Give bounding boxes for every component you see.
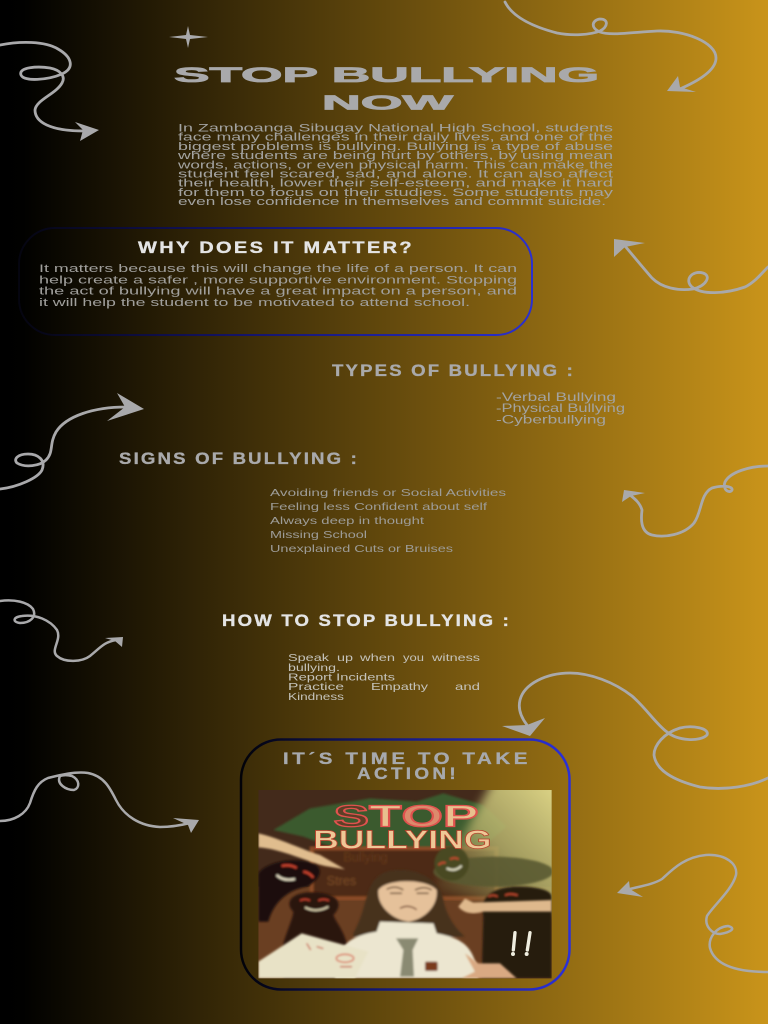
list: types of bullying <box>496 390 625 426</box>
list: signs of bullying: Always deep in thought <box>270 515 424 527</box>
list: signs of bullying <box>270 487 506 555</box>
heading: why does it matter: WHY DOES IT MATTER? <box>138 238 414 257</box>
list: how to stop bullying: you <box>403 652 424 664</box>
intro paragraph: face many challenges in their daily lives, and one of the <box>178 132 613 144</box>
intro paragraph: their health, lower their self-esteem, and make it hard <box>178 178 613 190</box>
list: how to stop bullying: witness <box>431 652 480 664</box>
text: why it matters: it will help the student to be motivated to attend school. <box>39 297 470 309</box>
heading: types of bullying: TYPES OF BULLYING : <box>332 361 575 380</box>
chalkboard: Bullying <box>343 851 388 865</box>
list: how to stop bullying: Speak <box>288 652 330 664</box>
title <box>174 64 599 114</box>
girl <box>335 870 478 978</box>
list: types of bullying: -Physical Bullying <box>496 401 625 415</box>
intro paragraph: biggest problems is bullying. Bullying is a type of abuse <box>178 141 613 153</box>
arrow: top-right curl <box>505 2 716 92</box>
list: how to stop bullying: bullying. <box>288 662 340 674</box>
list: signs of bullying: Missing School <box>270 529 367 541</box>
title: NOW <box>322 92 453 114</box>
arrow: large right curl pointing down-left <box>502 673 768 788</box>
list: how to stop bullying: and <box>455 681 480 693</box>
shadow figure left bottom <box>283 892 347 978</box>
list: how to stop bullying: up <box>337 652 353 664</box>
list: how to stop bullying: Empathy <box>371 681 429 693</box>
spotlight <box>436 790 552 917</box>
heading: it's time to take action: IT´S TIME TO TAKE <box>283 749 531 768</box>
illustration: stop bullying poster <box>258 780 563 978</box>
heading: how to stop bullying: HOW TO STOP BULLYING : <box>222 611 511 630</box>
hand pointing right <box>458 898 552 913</box>
arrow: right curl pointing up-left <box>614 239 768 293</box>
arrow: left curl pointing right <box>0 393 144 489</box>
list: how to stop bullying: Practice <box>288 681 344 693</box>
shadow figure right top <box>433 846 553 887</box>
icon: sparkle star <box>169 26 208 48</box>
chalkboard <box>312 848 497 898</box>
intro paragraph: even lose confidence in themselves and commit suicide. <box>178 196 606 208</box>
small loop <box>59 775 78 790</box>
list: types of bullying: -Cyberbullying <box>496 412 606 426</box>
exam paper <box>258 933 368 978</box>
panel: why does it matter <box>19 228 532 335</box>
arrow: top-left curl <box>0 42 99 141</box>
tree foliage <box>274 792 486 848</box>
list: types of bullying: -Verbal Bullying <box>496 390 616 404</box>
poster text: BULLYING <box>313 825 491 855</box>
hand pointing left <box>258 833 345 869</box>
heading: it's time to take action: ACTION! <box>357 764 459 783</box>
panel: take action <box>241 740 570 990</box>
arrow: right squiggle pointing left <box>622 466 768 536</box>
list: how to stop bullying: Report Incidents <box>288 672 395 684</box>
hand bottom <box>462 953 517 978</box>
intro paragraph: student feel scared, sad, and alone. It can also affect <box>178 168 613 180</box>
arrow: left squiggle pointing right <box>0 600 123 661</box>
intro paragraph: words, actions, or even physical harm. This can make the <box>176 159 613 171</box>
list: signs of bullying: Unexplained Cuts or Bruises <box>270 543 453 555</box>
poster text: STOP <box>333 800 478 834</box>
intro paragraph <box>176 122 614 208</box>
heading: it's time to take action <box>283 749 531 783</box>
shadow figure right bottom <box>482 887 552 978</box>
arrow: bottom-right curl <box>617 855 768 972</box>
chalkboard: Stres <box>327 874 356 888</box>
text: why it matters: It matters because this will change the life of a person. It can <box>39 263 517 275</box>
list: how to stop bullying: Kindness <box>288 691 344 703</box>
exclamation marks <box>511 933 530 956</box>
list: how to stop bullying: when <box>359 652 395 664</box>
arrow: bottom-left curl <box>0 772 199 833</box>
list: signs of bullying: Avoiding friends or Social Activities <box>270 487 506 499</box>
intro paragraph: where students are being hurt by others, by using mean <box>176 150 613 162</box>
heading: signs of bullying: SIGNS OF BULLYING : <box>119 449 359 468</box>
poster text <box>315 804 490 850</box>
intro paragraph: In Zamboanga Sibugay National High School, students <box>178 122 614 134</box>
text: why it matters: the act of bullying will have a great impact on a person, and <box>39 286 517 298</box>
list: signs of bullying: Feeling less Confident about self <box>270 501 487 513</box>
shadow figure left top <box>258 860 320 922</box>
text: why it matters: help create a safer , more supportive environment. Stopping <box>39 274 517 286</box>
text: why it matters <box>39 263 517 309</box>
title: STOP BULLYING <box>174 64 599 87</box>
list: how to stop bullying <box>288 652 480 703</box>
intro paragraph: for them to focus on their studies. Some students may <box>178 187 614 199</box>
